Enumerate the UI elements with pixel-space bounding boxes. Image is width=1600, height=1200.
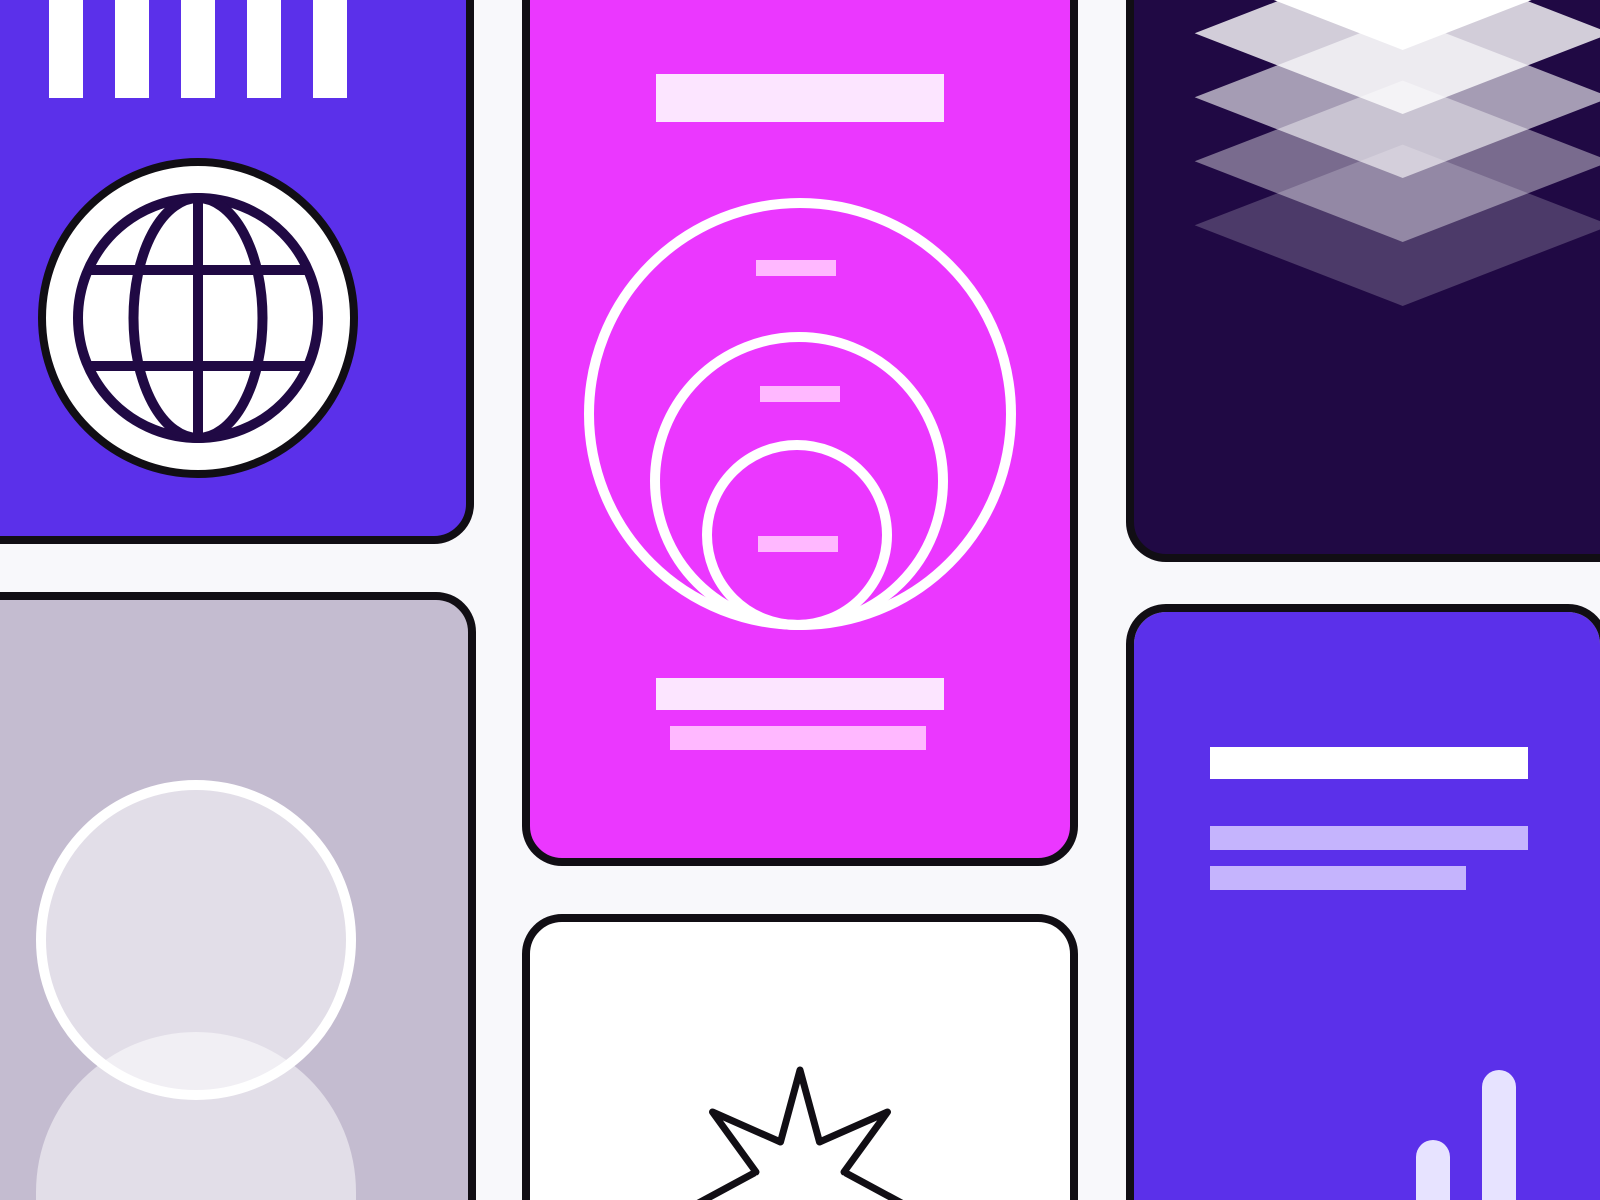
panel: purple bar chart card <box>1126 604 1600 1200</box>
caption bars <box>656 678 944 750</box>
text lines <box>1210 826 1528 890</box>
icon: profile head and shoulders <box>36 785 356 1200</box>
panel: dark layers card <box>1130 0 1600 558</box>
chart: nested circles <box>589 203 1011 625</box>
icon: stacked translucent layers <box>1195 0 1600 306</box>
heading bar <box>656 74 944 122</box>
panel: grey profile card <box>0 596 472 1200</box>
bar chart <box>1416 1070 1516 1200</box>
panel: purple globe card <box>0 0 470 540</box>
panel: magenta nested circles card <box>526 0 1074 862</box>
white header stripes <box>49 0 347 98</box>
icon: globe <box>42 162 354 474</box>
heading bar <box>1210 747 1528 779</box>
panel: white star card <box>526 918 1074 1200</box>
icon: outlined star <box>697 1070 903 1200</box>
